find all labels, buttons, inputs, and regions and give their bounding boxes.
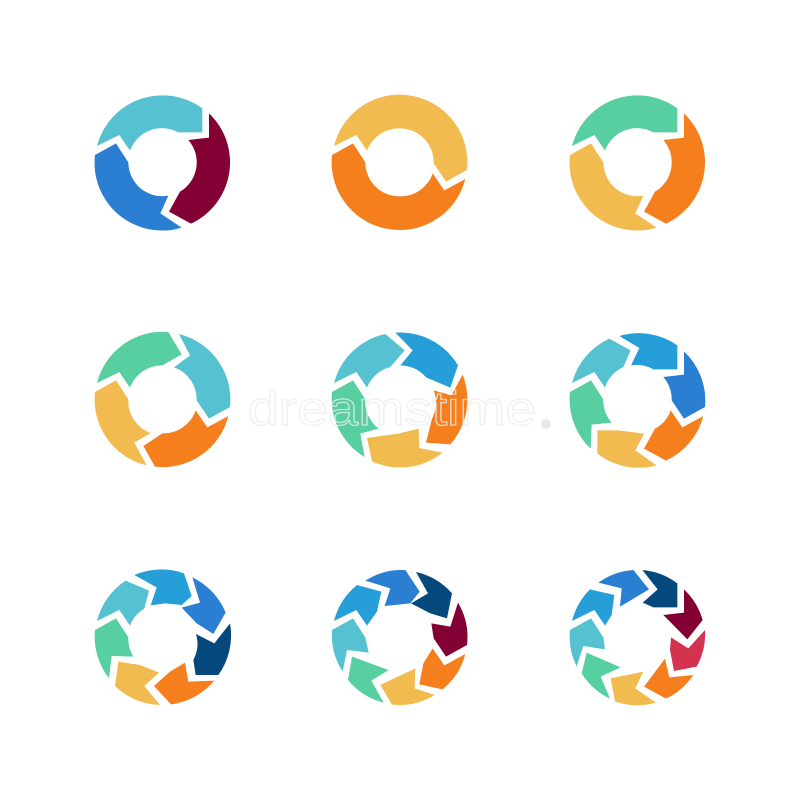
arrow: teal bbox=[97, 95, 202, 151]
arrow: teal bbox=[332, 618, 369, 672]
arrow: orange bbox=[154, 663, 214, 704]
ring: 4 arrows bbox=[95, 332, 230, 467]
arrow: teal bbox=[97, 581, 149, 626]
arrow: yellow bbox=[334, 95, 467, 182]
arrow: teal bbox=[174, 334, 230, 419]
arrow: yellow bbox=[95, 380, 151, 465]
ring: 7 arrows bbox=[95, 569, 231, 705]
ring: 3 arrows green, orange, yellow bbox=[570, 95, 705, 231]
ring: 2 arrows yellow, orange bbox=[332, 95, 467, 230]
arrow: green bbox=[582, 653, 621, 699]
watermark bbox=[248, 383, 551, 436]
arrow: orange bbox=[419, 648, 465, 689]
ring: 5 arrows bbox=[332, 333, 467, 468]
arrow: yellow bbox=[597, 430, 657, 468]
ring: 3 arrows teal, maroon, blue bbox=[95, 95, 230, 231]
arrow: teal bbox=[570, 618, 605, 667]
arrow: green bbox=[570, 380, 612, 449]
arrow: teal bbox=[334, 334, 405, 388]
arrow: blue bbox=[365, 570, 420, 606]
arrow: orange bbox=[644, 410, 703, 461]
arrow: green bbox=[332, 380, 379, 457]
arrow: red bbox=[670, 630, 705, 671]
arrow: maroon bbox=[663, 589, 703, 639]
arrow: maroon bbox=[169, 113, 230, 224]
arrow: maroon bbox=[431, 603, 467, 657]
arrow: green bbox=[348, 657, 389, 703]
arrow: orange bbox=[332, 143, 465, 230]
ring: 6 arrows bbox=[570, 333, 705, 468]
arrow: green bbox=[95, 618, 133, 678]
arrow: orange bbox=[426, 375, 467, 444]
ring: 9 arrows bbox=[570, 570, 705, 705]
arrow: blue bbox=[95, 143, 182, 231]
arrow: blue bbox=[598, 570, 649, 607]
arrow: orange bbox=[644, 659, 693, 699]
arrow: yellow bbox=[380, 668, 435, 705]
arrow: mid blue bbox=[395, 333, 458, 388]
arrow: blue bbox=[182, 577, 226, 634]
arrow: orange bbox=[644, 113, 705, 224]
arrow: yellow bbox=[611, 672, 656, 705]
arrow: teal bbox=[572, 339, 631, 388]
ring: 8 arrows bbox=[332, 570, 467, 705]
arrow: mid blue bbox=[134, 569, 192, 605]
arrow: blue bbox=[663, 351, 705, 419]
arrow: navy bbox=[193, 623, 231, 675]
arrow: mid blue bbox=[572, 589, 614, 626]
arrow: yellow bbox=[367, 429, 443, 468]
arrow: navy bbox=[642, 570, 677, 607]
arrow: mid blue bbox=[334, 585, 381, 626]
arrow: yellow bbox=[115, 662, 160, 705]
arrow: mid blue bbox=[619, 333, 677, 369]
arrow: yellow bbox=[570, 143, 657, 231]
arrow: navy bbox=[411, 572, 452, 618]
arrow: green bbox=[97, 332, 182, 388]
arrow: orange bbox=[143, 410, 228, 467]
arrow: green bbox=[572, 95, 677, 151]
watermark dot bbox=[541, 419, 551, 429]
watermark text: dreamstime bbox=[248, 383, 536, 436]
